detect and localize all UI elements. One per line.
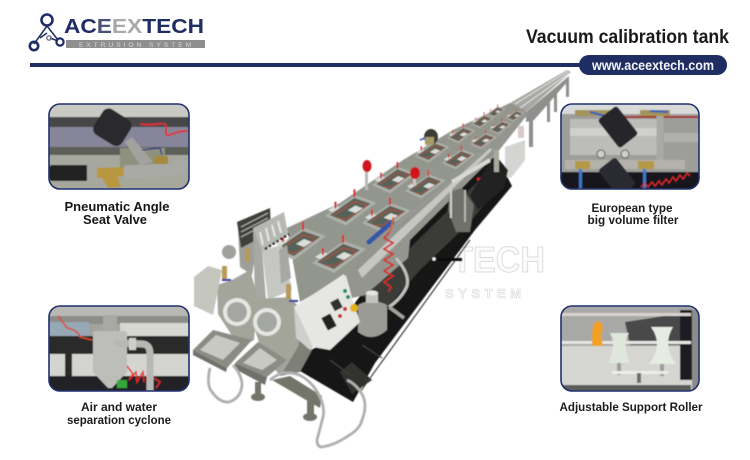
lower frame highlights bbox=[330, 240, 470, 392]
valve stem bbox=[125, 137, 153, 165]
green part bbox=[117, 380, 127, 388]
tank units bbox=[272, 104, 524, 273]
black hose bbox=[49, 165, 89, 181]
header rule bbox=[30, 63, 585, 67]
logo subtitle bar bbox=[66, 40, 205, 49]
panel: adjustable support roller bbox=[561, 306, 699, 391]
far-end rail bbox=[510, 70, 571, 112]
red air line bbox=[140, 124, 188, 135]
cyclone body bbox=[102, 316, 118, 324]
manifold panels bbox=[237, 208, 292, 300]
rollers bbox=[608, 333, 630, 363]
side pipe bbox=[452, 160, 490, 182]
hopper end frame bbox=[292, 276, 352, 350]
title: Vacuum calibration tank bbox=[526, 27, 729, 48]
upper filter bbox=[597, 105, 639, 149]
top valve bbox=[420, 129, 438, 145]
blue line bbox=[142, 148, 162, 155]
control box bbox=[294, 274, 360, 350]
outlet pipe bbox=[126, 339, 154, 390]
red hose bbox=[58, 316, 92, 340]
pressure gauge area bbox=[222, 245, 236, 259]
panel: air and water separation cyclone bbox=[49, 306, 189, 391]
panel: european type filter bbox=[561, 104, 699, 197]
caption: air and water separation cyclone bbox=[67, 402, 171, 427]
warning beacons bbox=[362, 160, 420, 190]
caption: adjustable support roller: Adjustable Support Roller bbox=[560, 402, 703, 414]
black brackets on frame bbox=[432, 257, 462, 261]
panel: pneumatic angle seat valve bbox=[49, 104, 189, 189]
black frame bbox=[288, 155, 512, 402]
side valves bbox=[448, 150, 508, 232]
shafts bbox=[617, 363, 621, 375]
stand and feet bbox=[251, 376, 322, 421]
blue manifold and red tubing bbox=[369, 218, 393, 291]
electrical box bbox=[505, 140, 525, 178]
translucent bag between struts bbox=[262, 245, 292, 300]
caption: pneumatic angle seat valve bbox=[64, 199, 170, 227]
watermark bbox=[445, 239, 545, 301]
logo icon: linked gears bbox=[30, 14, 64, 50]
collection hoppers bbox=[193, 330, 287, 385]
far-end rail supports bbox=[518, 76, 569, 147]
separator cylinder bbox=[358, 290, 404, 337]
lower pipes bbox=[565, 160, 685, 169]
logo bbox=[30, 14, 205, 50]
website pill: www.aceextech.com bbox=[591, 57, 714, 73]
side wall bbox=[345, 110, 528, 298]
brass fittings bbox=[222, 248, 298, 302]
logo subtitle bar: EXTRUSION SYSTEM bbox=[79, 42, 191, 49]
dark base bbox=[561, 172, 699, 189]
caption: european type filter bbox=[588, 203, 679, 227]
logo wordmark: ACEEXTECH bbox=[64, 15, 204, 38]
large clear hose bbox=[389, 258, 408, 307]
brass fitting bbox=[96, 167, 126, 188]
orange clamp bbox=[592, 321, 603, 346]
upper brass valves bbox=[575, 110, 620, 116]
watermark: TECH bbox=[452, 239, 545, 280]
tank top surface bbox=[287, 103, 525, 302]
caption: air and water separation cyclone: Air and water bbox=[81, 402, 158, 414]
drain hoses bbox=[208, 365, 365, 447]
caption: air and water separation cyclone: separation cyclone bbox=[67, 415, 171, 427]
caption: pneumatic angle seat valve: Pneumatic Angle bbox=[64, 199, 170, 214]
lower filter bbox=[598, 158, 635, 188]
sight windows bbox=[223, 298, 281, 336]
caption: european type filter: European type bbox=[592, 203, 672, 215]
caption: european type filter: big volume filter bbox=[588, 215, 679, 227]
dark machine interior bbox=[362, 160, 506, 310]
red pipe section bbox=[477, 174, 488, 179]
watermark: SYSTEM bbox=[445, 286, 521, 301]
caption: pneumatic angle seat valve: Seat Valve bbox=[83, 212, 147, 227]
housings bbox=[217, 270, 312, 376]
silver pipe bbox=[123, 164, 166, 176]
small side box bbox=[194, 266, 222, 315]
actuator bbox=[92, 108, 132, 147]
main machine: vacuum calibration tank line bbox=[193, 70, 571, 447]
red coil bbox=[641, 173, 690, 187]
gauges bbox=[597, 150, 605, 158]
red coil bbox=[127, 366, 160, 388]
